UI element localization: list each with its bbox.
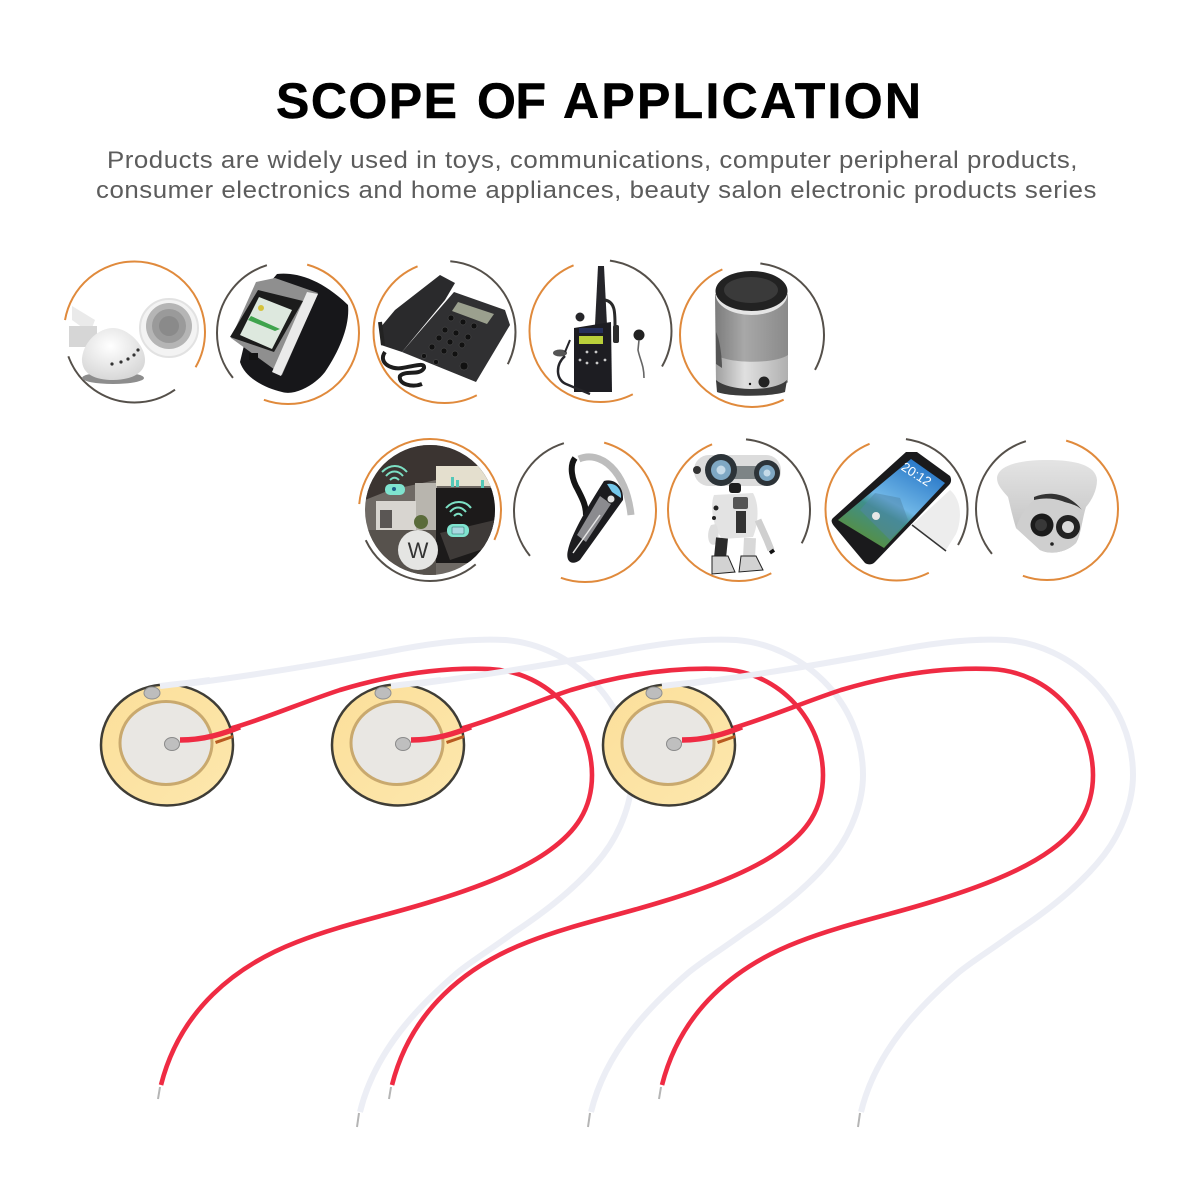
title: APPLICATION [563,73,921,129]
icon: smart home room: W [408,538,429,563]
title: OF [477,73,546,129]
icon: earphones [64,262,205,402]
icon: bluetooth earpiece [514,440,656,582]
piezo disc 1 [101,680,240,806]
wire set 1 [158,640,632,1127]
icon: walkie-talkie with earpiece [530,260,672,402]
wire set 3 [659,640,1133,1127]
icon: smart home room [359,439,501,581]
wire set 2 [389,640,863,1127]
icon: dome security camera [976,438,1118,580]
piezo disc 3 [603,680,742,806]
icon: smartphone: 20:12 [899,459,934,489]
subtitle text block [96,147,1097,204]
subtitle text block: consumer electronics and home appliances, beauty salon electronic products series [96,177,1097,204]
icon: cylindrical speaker [680,263,824,407]
title: SCOPE [276,73,457,129]
icon: robot [668,439,810,581]
title [276,73,921,129]
icon: desk telephone [374,261,516,403]
icon: smart watch [217,262,359,404]
icon: smartphone [826,438,968,580]
piezo disc 2 [332,680,471,806]
subtitle text block: Products are widely used in toys, communications, computer peripheral products, [107,147,1078,174]
